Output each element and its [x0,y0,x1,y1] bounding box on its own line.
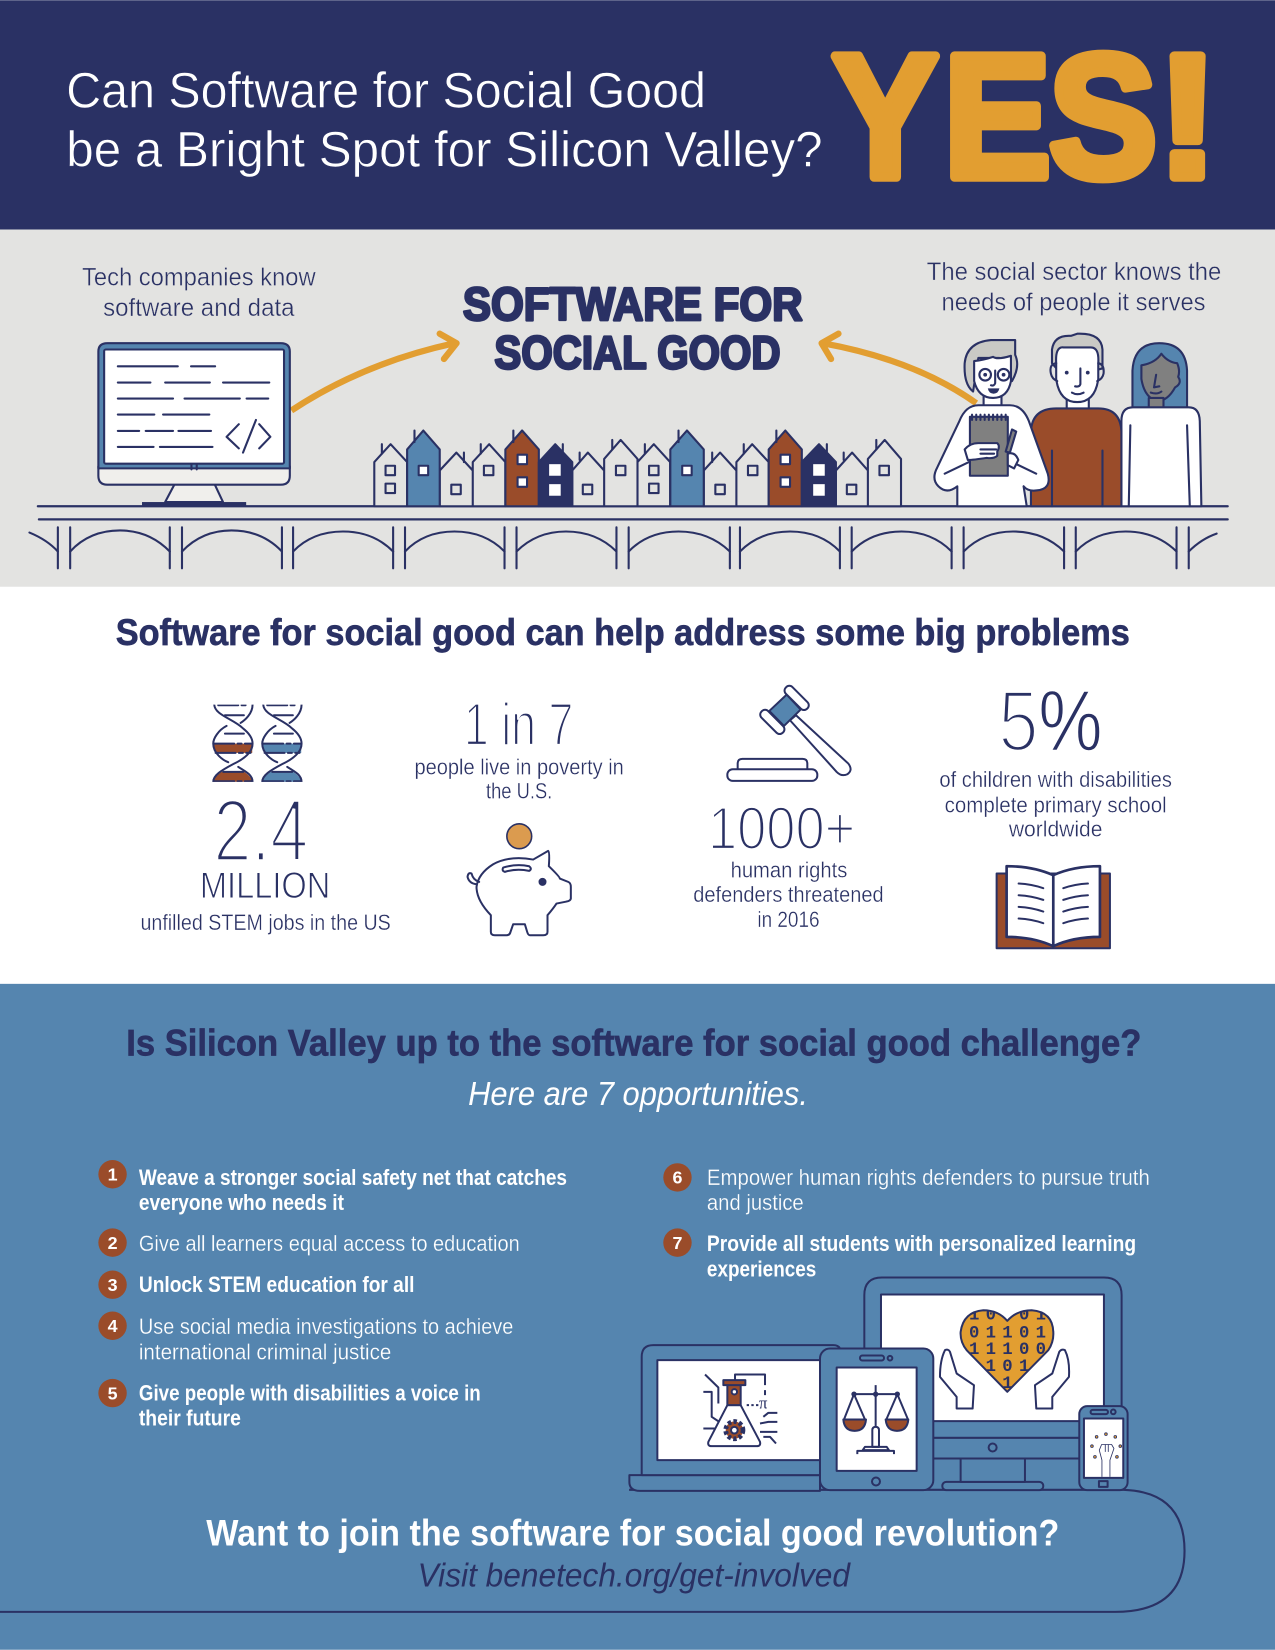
item 4 [98,1312,513,1364]
caption: people live in poverty in [414,755,624,780]
center heading: SOCIAL GOOD [494,326,781,378]
person: woman with blue hair [1121,343,1201,506]
panel: software for social good illustration [0,230,1275,587]
number: 1000+ [708,795,855,862]
icon: open book [997,866,1110,948]
device: desktop monitor [864,1278,1122,1490]
YES! headline: E [944,19,1051,215]
icon: scales of justice [843,1385,908,1454]
item 3: 3 [108,1275,118,1295]
icon: gavel [727,684,851,781]
number: 5% [998,673,1102,769]
item 2: Give all learners equal access to education [139,1231,520,1256]
person: man in brown sweater [1031,334,1121,506]
caption [414,755,624,804]
stat: 1 in 7 [414,691,624,935]
icon: heart of binary digits in hands: 1 [1002,1375,1013,1394]
title: Can Software for Social Good [66,62,706,119]
item 5: Give people with disabilities a voice in [139,1380,481,1405]
text: tech companies: software and data [103,294,295,322]
item 7: Provide all students with personalized learning [707,1231,1136,1256]
caption [693,858,884,932]
center heading: SOFTWARE FOR [463,278,803,330]
stat: 2.4 million [140,705,391,935]
item 6 [663,1163,1150,1215]
item 2: 2 [108,1233,118,1253]
item 7: 7 [672,1233,682,1253]
stat: 5% [939,673,1172,948]
icon: heart of binary digits in hands: 01101 [969,1325,1046,1344]
icon: flask with gear: π [759,1394,768,1413]
icon: flask with gear [703,1375,777,1446]
text: tech companies [82,263,316,322]
YES! headline: S [1049,19,1157,215]
center heading [463,278,803,378]
caption: human rights [731,858,847,883]
list: opportunities 1 to 5 [98,1160,567,1431]
caption: worldwide [1008,817,1102,842]
item 4: international criminal justice [139,1339,391,1364]
bridge [29,506,1228,568]
icon: heart of binary digits in hands: 10 01 [969,1307,1046,1326]
caption: defenders threatened [693,882,884,907]
call to action [206,1513,1059,1595]
item 3 [98,1271,414,1299]
item 4: Use social media investigations to achieve [139,1314,513,1339]
title: be a Bright Spot for Silicon Valley? [66,120,823,177]
item 5: 5 [108,1383,118,1403]
YES! headline: Y [832,19,938,215]
text: tech companies: Tech companies know [82,263,316,291]
device: phone [1079,1406,1128,1490]
item 4: 4 [108,1316,118,1336]
icon: DNA [213,705,302,782]
item 7 [663,1228,1136,1281]
item 6: Empower human rights defenders to pursue truth [707,1165,1150,1190]
illustration: devices [629,1278,1128,1491]
text: social sector: The social sector knows the [927,258,1221,286]
icon: raised fist [1091,1433,1122,1477]
icon: piggy bank with coin [468,824,571,935]
item 5 [98,1379,481,1431]
call to action: Want to join the software for social good revolution? [206,1513,1059,1554]
subheading: Here are 7 opportunities. [468,1076,808,1113]
caption: complete primary school [945,792,1167,817]
panel: header [0,0,1275,230]
number: 2.4: 2.4 [214,781,308,880]
caption: unfilled STEM jobs in the US [140,910,391,935]
icon: heart of binary digits in hands [940,1307,1069,1409]
illustration: three people [934,334,1201,506]
YES! headline: ! [1157,19,1218,215]
label: MILLION: MILLION [200,865,330,906]
item 6: 6 [672,1168,682,1188]
number: 1 in 7 [464,691,573,758]
title [66,62,823,177]
panel: seven opportunities [0,984,1275,1650]
item 6: and justice [707,1190,804,1215]
icon: heart of binary digits in hands: 11100 [969,1341,1046,1360]
YES! headline [832,19,1218,215]
item 5: their future [139,1406,241,1431]
item 3: Unlock STEM education for all [139,1272,414,1297]
caption [939,767,1172,842]
device: laptop [629,1345,840,1491]
icon: desktop computer [98,343,290,507]
text: social sector: needs of people it serves [942,289,1206,317]
heading: big problems: Software for social good can help address some big problems [116,612,1130,653]
houses row [374,431,901,506]
arrow: right to center [822,334,976,403]
person: man with glasses and notepad [934,340,1049,506]
device: tablet [820,1349,933,1490]
item 7: experiences [707,1256,816,1281]
stat: 1000+ [693,684,884,932]
item 1: everyone who needs it [139,1190,345,1215]
list: opportunities 6 and 7 [663,1163,1150,1281]
caption: in 2016 [757,907,819,932]
heading: challenge: Is Silicon Valley up to the software for social good challenge? [126,1022,1141,1063]
caption: of children with disabilities [939,767,1172,792]
item 1: 1 [108,1165,118,1185]
icon: heart of binary digits in hands: 101 [986,1358,1029,1377]
text: social sector [927,258,1221,317]
item 1: Weave a stronger social safety net that catches [139,1165,567,1190]
decorative line: swoosh under devices [0,1490,1185,1612]
call to action: Visit benetech.org/get-involved [418,1558,851,1595]
arrow: left to center [291,334,457,411]
caption: the U.S. [486,779,552,804]
item 1 [98,1160,567,1215]
